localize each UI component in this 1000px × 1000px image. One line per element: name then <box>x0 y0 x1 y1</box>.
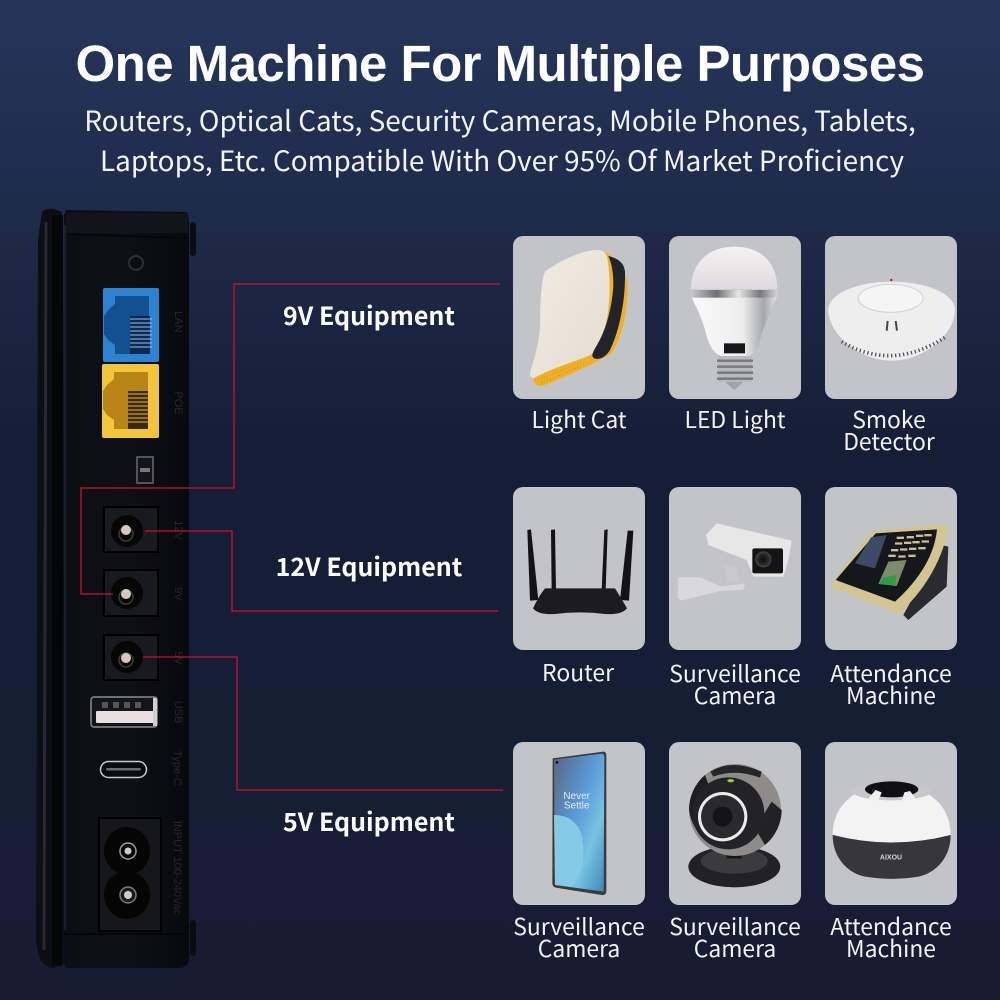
connector line: 9V <box>81 284 500 594</box>
row: 5V devices <box>513 742 957 964</box>
card: speaker: Machine <box>846 930 936 964</box>
row: 9V devices <box>513 236 957 457</box>
engraved labels: POE <box>172 391 184 415</box>
label: 5V Equipment: 5V Equipment <box>283 803 455 839</box>
engraved labels: 12V <box>172 520 184 540</box>
engraved labels: USB <box>172 701 184 723</box>
label: 9V Equipment: 9V Equipment <box>283 297 455 333</box>
card: phone <box>513 742 645 964</box>
card: phone: Camera <box>538 930 620 964</box>
connector line: 12V <box>145 531 498 611</box>
card: phone: Surveillance <box>513 908 645 942</box>
DC jack 12V <box>104 507 158 552</box>
card: Router: Router <box>542 654 614 688</box>
card: speaker: AIXOU <box>880 855 902 862</box>
subtitle: Routers, Optical Cats, Security Cameras, Mobile Phones, Tablets, <box>84 100 916 140</box>
port: yellow POE <box>102 364 159 438</box>
card: Surveillance Camera (12V): Camera <box>694 677 776 711</box>
card: LED Light: LED Light <box>685 401 786 435</box>
card: webcam: Surveillance <box>669 908 801 942</box>
switch <box>137 457 153 483</box>
engraved labels: LAN <box>172 311 184 333</box>
label: 12V Equipment: 12V Equipment <box>276 548 463 584</box>
port: USB-A <box>91 697 157 727</box>
subtitle <box>84 100 916 180</box>
card: LED Light <box>669 236 801 435</box>
DC jack 9V <box>104 570 158 616</box>
device body <box>36 209 196 968</box>
card: Attendance Machine (12V): Machine <box>846 677 936 711</box>
card: webcam: Camera <box>694 930 776 964</box>
port: USB-C <box>100 762 146 778</box>
card: Light Cat: Light Cat <box>531 401 627 435</box>
port: AC inlet <box>99 818 161 931</box>
card: Router <box>513 487 645 688</box>
card: phone: Settle <box>564 800 590 811</box>
engraved labels: 9V <box>172 587 184 601</box>
card: Light Cat <box>513 236 645 435</box>
DC jack 5V <box>104 635 158 680</box>
card: Smoke Detector <box>825 236 957 457</box>
row: 12V devices <box>513 487 957 711</box>
card: Surveillance Camera (12V): Surveillance <box>669 655 801 689</box>
card: Surveillance Camera (12V) <box>669 487 801 711</box>
card: Smoke Detector: Smoke <box>852 401 926 435</box>
card: speaker <box>825 742 957 964</box>
title: One Machine For Multiple Purposes <box>76 35 924 92</box>
card: Attendance Machine (12V): Attendance <box>830 655 952 689</box>
device: power adapter side view <box>36 209 196 968</box>
card: Smoke Detector: Detector <box>843 423 935 457</box>
port: blue LAN <box>103 288 159 362</box>
connector line: 5V <box>143 657 503 790</box>
card: phone: Never <box>563 791 591 802</box>
card: Attendance Machine (12V) <box>825 487 957 711</box>
engraved labels: Type-C <box>171 750 183 786</box>
engraved labels <box>171 311 184 916</box>
subtitle: Laptops, Etc. Compatible With Over 95% Of Market Proficiency <box>100 140 904 180</box>
engraved labels: INPUT 100-240Vac <box>171 821 183 916</box>
card: webcam <box>669 742 801 964</box>
card: speaker: Attendance <box>830 908 952 942</box>
engraved labels: 5V <box>172 651 184 665</box>
